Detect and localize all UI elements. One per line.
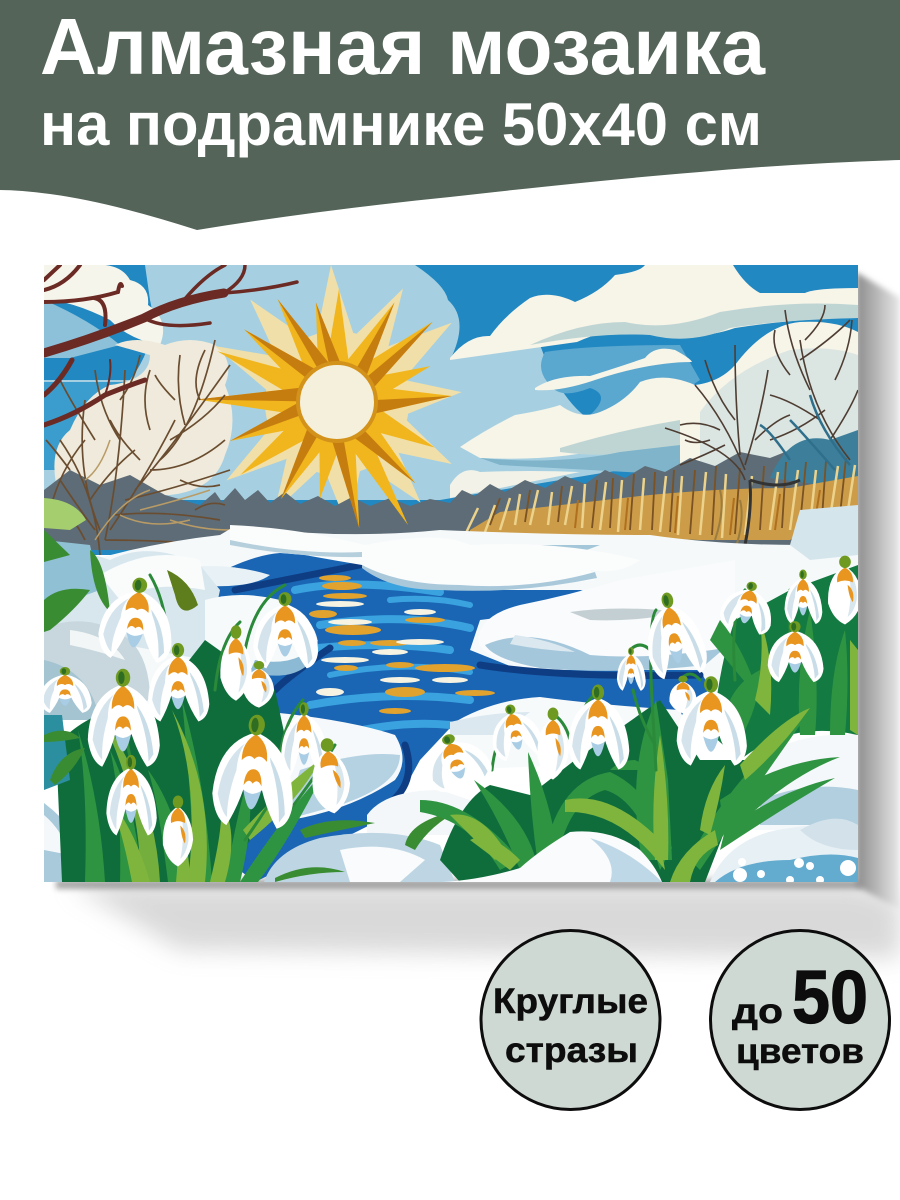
green leaves right: [420, 565, 858, 882]
green leaves left: [44, 498, 460, 882]
front snow mounds: [442, 819, 858, 884]
badge: round rhinestones: Круглые: [493, 982, 648, 1021]
pale sky around sun: [44, 265, 620, 500]
blue-teal tree mass: [770, 430, 858, 490]
bare tree left: [46, 340, 230, 555]
header banner: [0, 0, 900, 230]
badge: up to 50 colours: 50: [792, 955, 868, 1039]
badge: up to 50 colours: цветов: [736, 1032, 864, 1071]
snow rocks right: [450, 505, 858, 830]
sun reflections on water: [309, 575, 495, 714]
golden reeds: [465, 458, 858, 540]
badge: up to 50 colours: [710, 930, 890, 1110]
snow ice shelves: [175, 525, 735, 671]
sun halo: [214, 265, 462, 504]
bare trees right: [665, 305, 858, 480]
subtitle: на подрамнике 50х40 см: [40, 91, 762, 158]
far river pool: [542, 545, 600, 550]
snowdrop flowers: [39, 556, 862, 867]
badge: round rhinestones: стразы: [505, 1031, 638, 1070]
canvas drop shadow: [56, 272, 900, 958]
title: Алмазная мозаика: [40, 2, 765, 91]
sky: [44, 265, 858, 555]
snow rocks left: [44, 540, 470, 882]
river dark edges: [235, 565, 700, 812]
river highlights: [295, 584, 470, 735]
badge: up to 50 colours: до: [732, 992, 783, 1031]
dark red branches: [44, 265, 297, 425]
badge: round rhinestones: [481, 930, 660, 1110]
sun: [197, 289, 453, 531]
river: [200, 553, 730, 882]
snow bank: [102, 529, 858, 704]
painting: snowdrops by a winter river: [39, 265, 862, 884]
distant forest: [44, 451, 813, 550]
clouds: [44, 265, 858, 500]
